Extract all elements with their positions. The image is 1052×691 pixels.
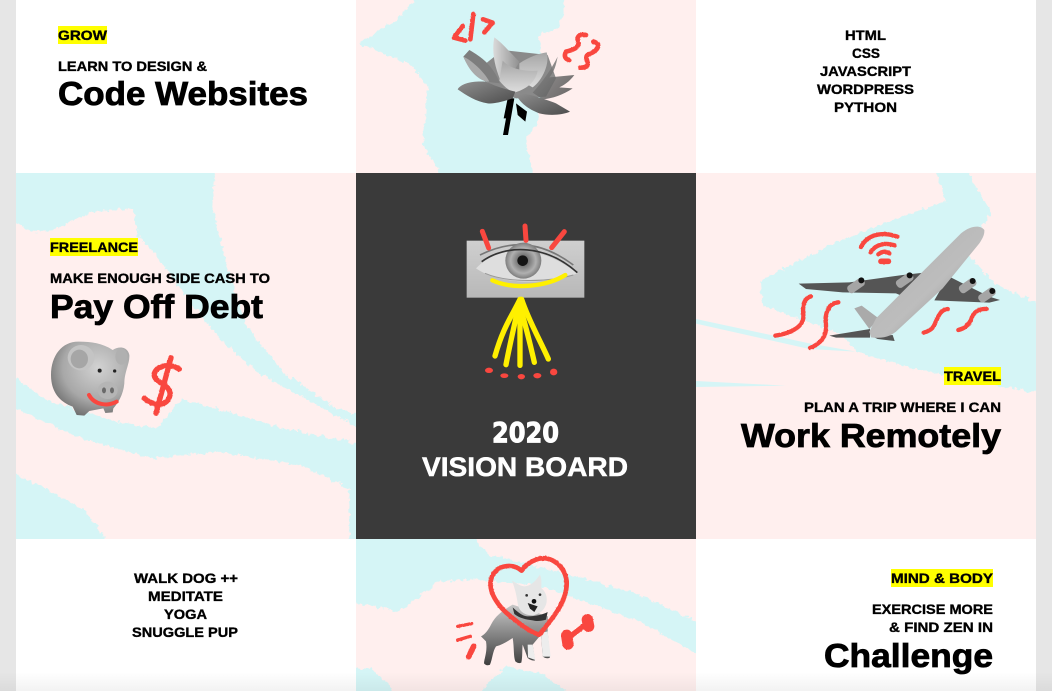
title: vision board: VISION BOARD: [422, 452, 628, 482]
panel: languages list: [696, 0, 1036, 173]
list: html css javascript wordpress python: JAVASCRIPT: [820, 63, 911, 79]
illustration: piggy bank and dollar sign: [51, 342, 179, 416]
tag: mind and body: MIND & BODY: [891, 570, 994, 586]
list: html css javascript wordpress python: PYTHON: [834, 99, 897, 115]
list: walk dog meditate yoga snuggle pup: YOGA: [164, 606, 207, 622]
subheading: learn to design: LEARN TO DESIGN &: [58, 58, 207, 74]
brush stroke: cyan: [356, 539, 696, 691]
icon: code brackets: [454, 14, 598, 68]
illustration: eye with rays: [467, 226, 584, 379]
illustration: lotus flower: [458, 37, 574, 135]
list: html css javascript wordpress python: WORDPRESS: [817, 81, 914, 97]
brush background: [696, 162, 1046, 539]
tag: freelance: FREELANCE: [50, 239, 138, 255]
heading: work remotely: Work Remotely: [741, 417, 1002, 454]
eye photo: [467, 241, 584, 298]
illustration: airplane: [799, 227, 1000, 341]
yellow smile and rays: [492, 275, 565, 365]
heading: challenge: Challenge: [824, 637, 993, 674]
tag: travel: TRAVEL: [944, 368, 1001, 384]
heading: pay off debt: Pay Off Debt: [50, 288, 263, 325]
list: html css javascript wordpress python: HTML: [845, 27, 886, 43]
list: html css javascript wordpress python: CSS: [852, 45, 880, 61]
icon: heart, marks and dumbbell: [458, 558, 589, 657]
illustration: jumping dog: [481, 575, 551, 665]
icon: wifi and heat squiggles: [775, 234, 987, 348]
red dots: [485, 368, 557, 379]
list: walk dog meditate yoga snuggle pup: [132, 570, 238, 640]
title: 2020: 2020: [492, 416, 559, 449]
panel: freelance: [16, 173, 356, 539]
subheading: side cash: MAKE ENOUGH SIDE CASH TO: [50, 270, 270, 286]
subheading: plan a trip: PLAN A TRIP WHERE I CAN: [804, 399, 1001, 415]
panel: daily habits list: [16, 539, 356, 691]
list: walk dog meditate yoga snuggle pup: SNUGGLE PUP: [132, 624, 238, 640]
panel: mind and body: [696, 539, 1036, 691]
panel: center title: [356, 173, 696, 539]
brush background: [16, 173, 356, 539]
subheading: find zen: & FIND ZEN IN: [889, 619, 993, 635]
panel: lotus: [356, 0, 696, 183]
tag: grow: GROW: [58, 27, 108, 43]
list: walk dog meditate yoga snuggle pup: WALK DOG ++: [134, 570, 238, 586]
panel: travel: [696, 162, 1046, 539]
panel: grow: [16, 0, 356, 173]
red lashes: [482, 226, 564, 248]
heading: code websites: Code Websites: [58, 75, 308, 112]
brush stroke: cyan: [359, 0, 564, 183]
list: html css javascript wordpress python: [817, 27, 914, 115]
list: walk dog meditate yoga snuggle pup: MEDITATE: [148, 588, 223, 604]
subheading: exercise more: EXERCISE MORE: [872, 601, 993, 617]
panel: dog: [356, 539, 696, 691]
